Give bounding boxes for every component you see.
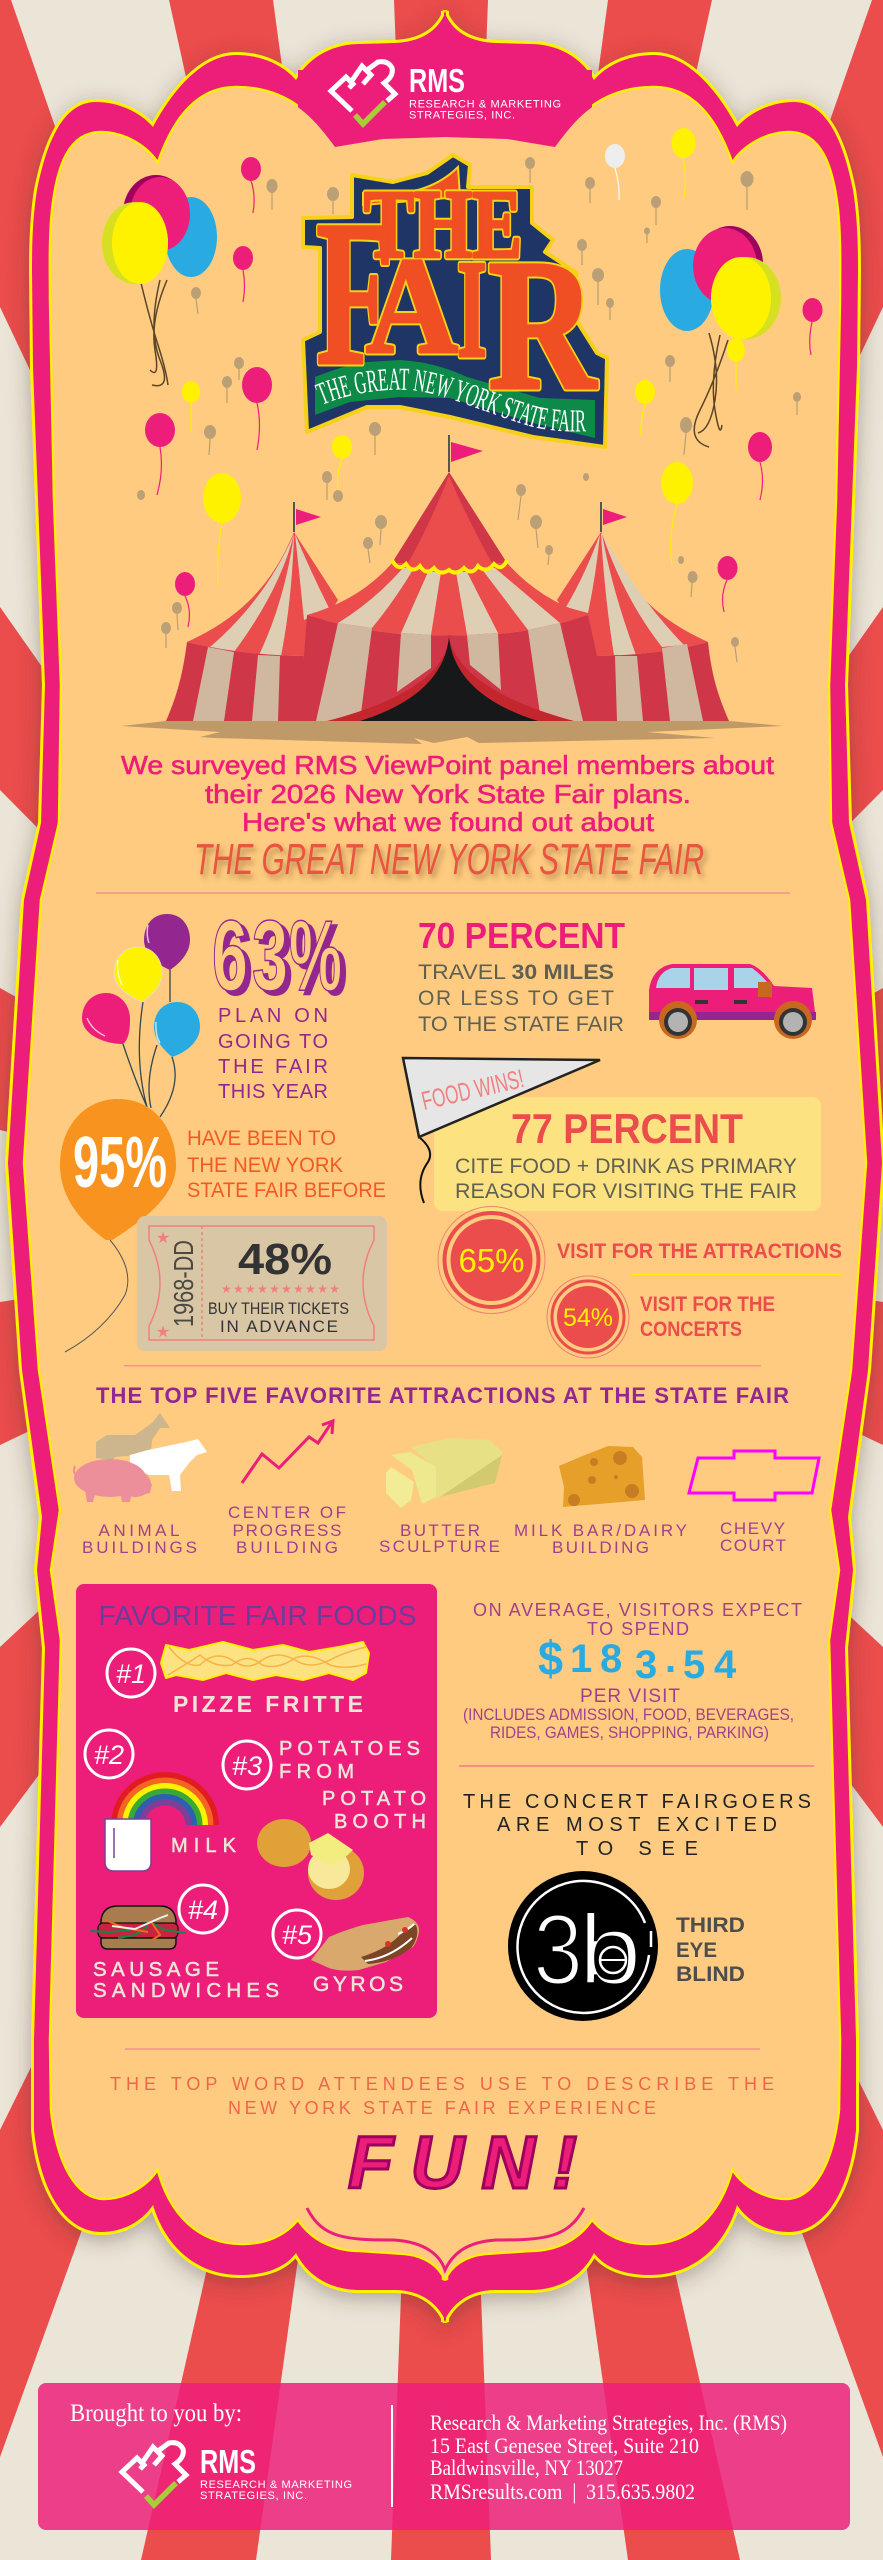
footer RMS logo: STRATEGIES, INC. <box>200 2490 307 2502</box>
icon: pennant food wins: FOOD WINS! <box>419 1063 527 1116</box>
panel: favorite fair foods <box>76 1584 437 2018</box>
stat: 63 percent: % <box>289 900 342 1012</box>
circus tents illustration <box>121 435 783 744</box>
food 3: potatoes: BOOTH <box>334 1811 426 1833</box>
top RMS logo: STRATEGIES, INC. <box>409 110 515 122</box>
stat: 95 percent balloon <box>60 1099 386 1352</box>
the wordmark letters: I <box>457 232 487 387</box>
concert heading: TO SEE <box>576 1838 698 1860</box>
stat: 65 percent attractions: 65% <box>458 1242 525 1279</box>
stat: average spend: RIDES, GAMES, SHOPPING, PARKING) <box>490 1723 769 1742</box>
decorative small balloons <box>137 128 822 662</box>
stat: 63 percent: 3 <box>252 900 288 1012</box>
attraction labels: PROGRESS <box>232 1521 342 1540</box>
the wordmark letters: F <box>316 178 394 408</box>
food 3: potatoes: FROM <box>279 1761 354 1783</box>
food 2: milk: #2 <box>94 1740 124 1770</box>
logo: third eye blind: THIRD <box>676 1914 745 1937</box>
stat: 70 percent: TRAVEL 30 MILES <box>418 961 614 984</box>
food 3: potatoes: #3 <box>232 1751 262 1781</box>
footer RMS logo: RESEARCH & MARKETING <box>200 2479 352 2491</box>
the wordmark letters: I <box>457 232 487 387</box>
food 1: pizze fritte <box>107 1642 369 1717</box>
food 1: pizze fritte: PIZZE FRITTE <box>173 1691 363 1717</box>
intro text: We surveyed RMS ViewPoint panel members about <box>121 750 775 780</box>
concert heading <box>463 1791 811 1860</box>
logo: third eye blind <box>508 1871 745 2021</box>
top RMS logo: RESEARCH & MARKETING <box>409 98 561 110</box>
icon: animal buildings <box>74 1413 207 1502</box>
stat: 63 percent: 3 <box>257 904 293 1016</box>
stat: 54 percent concerts: 54% <box>563 1304 613 1332</box>
contact details: 15 East Genesee Street, Suite 210 <box>430 2433 699 2458</box>
stat: 63 percent <box>212 900 347 1103</box>
spend amount <box>538 1633 737 1687</box>
stat: 63 percent: % <box>294 904 347 1016</box>
attraction labels: CHEVY <box>720 1519 785 1538</box>
the wordmark letters: THE <box>364 171 522 278</box>
food 1: pizze fritte: #1 <box>116 1659 146 1689</box>
stat: average spend: PER VISIT <box>580 1686 680 1707</box>
stat: 54 percent concerts: CONCERTS <box>640 1318 742 1341</box>
food 4: sausage sandwiches: SANDWICHES <box>93 1979 279 2002</box>
attraction labels: ANIMAL <box>98 1521 180 1540</box>
attraction labels: BUILDINGS <box>82 1538 197 1557</box>
the wordmark letters: F <box>316 178 394 408</box>
icon: chevy bowtie <box>689 1451 819 1500</box>
food 4: sausage sandwiches: SAUSAGE <box>93 1958 219 1981</box>
callout: 77 percent: 77 PERCENT <box>511 1105 743 1152</box>
food 2: milk: MILK <box>171 1835 237 1857</box>
ticket: 48 percent: ★ <box>156 1324 170 1341</box>
stat: 65 percent attractions: VISIT FOR THE ATTRACTIONS <box>557 1240 842 1263</box>
icon: butter <box>386 1438 502 1508</box>
stat: 63 percent: THE FAIR <box>218 1056 328 1078</box>
stat: average spend: ON AVERAGE, VISITORS EXPECT <box>473 1600 802 1620</box>
heading: favorite fair foods: FAVORITE FAIR FOODS <box>98 1600 416 1631</box>
attraction labels: BUILDING <box>552 1538 649 1557</box>
footer panel <box>38 2383 850 2530</box>
the wordmark letters: R <box>488 220 598 429</box>
concert heading: THE CONCERT FAIRGOERS <box>463 1791 811 1813</box>
logo: third eye blind: EYE <box>676 1939 717 1962</box>
top RMS logo <box>331 62 561 124</box>
icon: rising arrow <box>242 1421 333 1483</box>
stat: 63 percent: 6 <box>212 900 248 1012</box>
brought to you by: Brought to you by: <box>70 2400 242 2427</box>
icon: cheese <box>559 1446 645 1507</box>
stat: 70 percent <box>418 915 625 1036</box>
attraction labels: BUILDING <box>236 1538 338 1557</box>
stat: 63 percent: PLAN ON <box>218 1005 328 1027</box>
top word text: THE TOP WORD ATTENDEES USE TO DESCRIBE THE <box>110 2074 774 2094</box>
spend amount: . <box>665 1637 676 1681</box>
attraction labels: SCULPTURE <box>379 1537 500 1556</box>
the wordmark letters: A <box>366 229 458 382</box>
word: fun: FUN! <box>348 2121 577 2204</box>
callout: 77 percent <box>434 1097 821 1211</box>
stat: average spend: (INCLUDES ADMISSION, FOOD, BEVERAGES, <box>463 1705 794 1724</box>
the wordmark letters <box>316 167 598 429</box>
spend amount: 3 <box>635 1643 657 1687</box>
food 3: potatoes: POTATO <box>322 1788 426 1810</box>
ticket: 48 percent: 48% <box>238 1235 332 1284</box>
icon: left balloon cluster <box>102 175 217 386</box>
stat: 63 percent: GOING TO <box>218 1031 328 1053</box>
stat: 95 percent balloon: 95% <box>73 1123 167 1203</box>
stat: 95 percent balloon: STATE FAIR BEFORE <box>187 1179 386 1202</box>
contact details: Research & Marketing Strategies, Inc. (RMS) <box>430 2410 787 2435</box>
spend amount: 1 <box>570 1637 592 1681</box>
attraction labels: BUTTER <box>400 1521 480 1540</box>
stat: 54 percent concerts <box>547 1276 775 1358</box>
top word text <box>110 2074 774 2118</box>
fair logo <box>301 153 609 449</box>
icon: balloon bunch <box>82 914 200 1117</box>
stat: 65 percent attractions <box>438 1206 842 1314</box>
contact details: RMSresults.com | 315.635.9802 <box>430 2479 695 2504</box>
intro text <box>121 750 775 837</box>
stat: average spend: TO SPEND <box>587 1619 689 1639</box>
ticket: 48 percent: ★★★★★★★★★★ <box>221 1282 340 1296</box>
top word text: NEW YORK STATE FAIR EXPERIENCE <box>228 2098 656 2118</box>
contact details: Baldwinsville, NY 13027 <box>430 2455 623 2480</box>
top RMS logo: RMS <box>409 62 465 99</box>
attraction labels: CENTER OF <box>228 1503 346 1522</box>
intro text: Here's what we found out about <box>242 807 655 837</box>
stat: 70 percent: 70 PERCENT <box>418 915 625 956</box>
stat: 95 percent balloon: THE NEW YORK <box>187 1154 343 1177</box>
icon: right balloon cluster <box>660 226 781 447</box>
food 2: milk <box>85 1730 237 1871</box>
ticket: 48 percent: BUY THEIR TICKETS <box>208 1299 349 1318</box>
the wordmark letters: THE <box>364 171 522 278</box>
attraction labels: MILK BAR/DAIRY <box>514 1521 687 1540</box>
ticket: 48 percent: IN ADVANCE <box>220 1317 338 1336</box>
intro text: their 2026 New York State Fair plans. <box>205 779 691 809</box>
concert heading: ARE MOST EXCITED <box>497 1814 777 1836</box>
attraction labels: COURT <box>720 1536 786 1555</box>
ticket: 48 percent <box>137 1216 387 1351</box>
icon: car <box>649 964 816 1039</box>
spend amount: 4 <box>714 1643 737 1687</box>
food 4: sausage sandwiches <box>90 1885 279 2002</box>
contact details <box>430 2410 787 2504</box>
stat: 70 percent: OR LESS TO GET <box>418 987 614 1010</box>
logo: third eye blind: 3 <box>533 1894 583 2006</box>
heading: top five attractions: THE TOP FIVE FAVORITE ATTRACTIONS AT THE STATE FAIR <box>96 1383 789 1408</box>
stat: 95 percent balloon: HAVE BEEN TO <box>187 1127 336 1150</box>
stat: average spend <box>463 1600 802 1742</box>
icon: pennant food wins <box>403 1058 600 1203</box>
banner text: THE GREAT NEW YORK STATE FAIR <box>314 368 586 432</box>
food 5: gyros <box>273 1910 419 1996</box>
food 3: potatoes <box>223 1738 426 1900</box>
stat: 70 percent: TO THE STATE FAIR <box>418 1013 624 1036</box>
spend amount: $ <box>538 1633 563 1686</box>
the wordmark letters: A <box>366 229 458 382</box>
stat: 63 percent: 6 <box>217 904 253 1016</box>
footer RMS logo <box>122 2443 352 2505</box>
food 3: potatoes: POTATOES <box>279 1738 420 1760</box>
food 5: gyros: GYROS <box>313 1973 403 1996</box>
attraction labels <box>82 1503 786 1557</box>
food 4: sausage sandwiches: #4 <box>188 1895 218 1925</box>
ticket: 48 percent: ★ <box>156 1230 170 1247</box>
logo: third eye blind: b <box>578 1894 642 2006</box>
stat: 63 percent: THIS YEAR <box>218 1081 328 1103</box>
food 5: gyros: #5 <box>282 1920 313 1950</box>
footer RMS logo: RMS <box>200 2443 256 2480</box>
spend amount: 8 <box>600 1637 622 1681</box>
logo: third eye blind: BLIND <box>676 1963 745 1986</box>
ticket: 48 percent: 1968-DD <box>168 1240 199 1327</box>
stat: 54 percent concerts: VISIT FOR THE <box>640 1293 775 1316</box>
callout: 77 percent: REASON FOR VISITING THE FAIR <box>455 1180 797 1203</box>
the wordmark letters: R <box>488 220 598 429</box>
spend amount: 5 <box>683 1643 705 1687</box>
callout: 77 percent: CITE FOOD + DRINK AS PRIMARY <box>455 1155 797 1178</box>
